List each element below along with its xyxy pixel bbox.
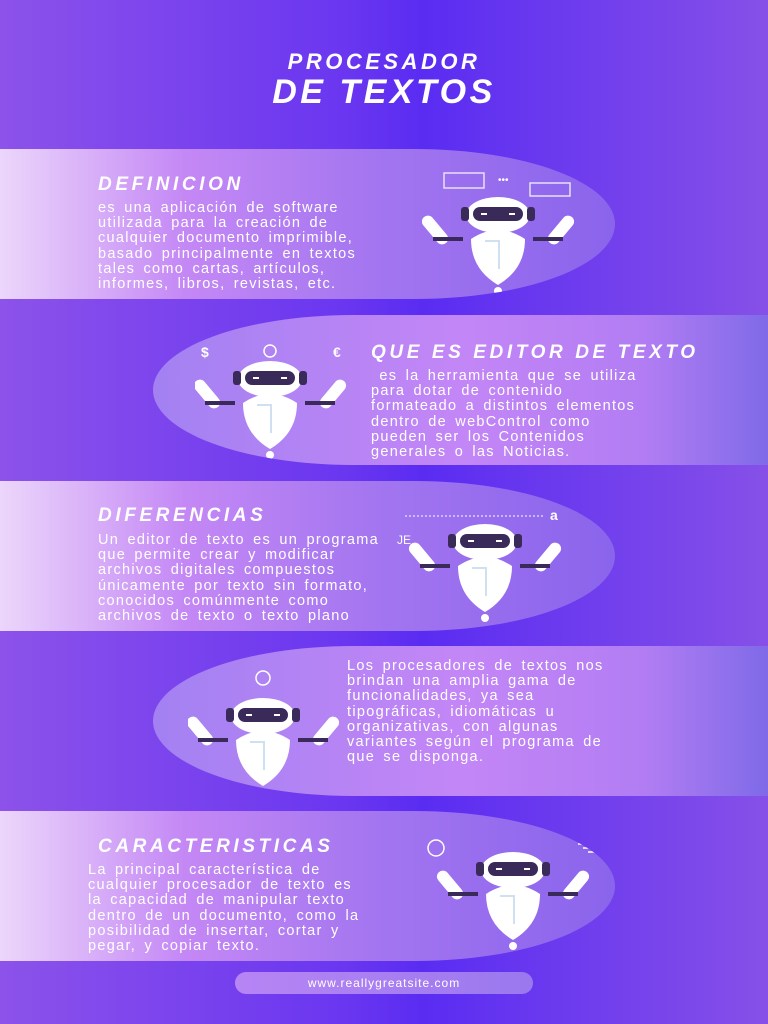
icon: robot with letters — [397, 507, 562, 622]
footer url pill: www.reallygreatsite.com — [308, 976, 460, 990]
text block: dentro de un documento, como la — [88, 908, 359, 924]
text block: únicamente por texto sin formato, — [98, 578, 368, 594]
text block: pueden ser los Contenidos — [371, 429, 585, 445]
text block: Los procesadores de textos nos — [347, 658, 604, 674]
text block: La principal característica de — [88, 862, 321, 878]
text block: archivos de texto o texto plano — [98, 608, 350, 624]
text block: utilizada para la creación de — [98, 215, 328, 231]
text block: cualquier procesador de texto es — [88, 877, 352, 893]
text block: brindan una amplia gama de — [347, 673, 577, 689]
text block: tales como cartas, artículos, — [98, 261, 325, 277]
title — [272, 49, 496, 111]
icon: robot with currency: $ — [201, 344, 209, 360]
text block — [347, 658, 604, 765]
text block: formateado a distintos elementos — [371, 398, 635, 414]
heading: DEFINICION — [98, 174, 244, 195]
icon: robot with currency — [195, 344, 346, 458]
text block: funcionalidades, ya sea — [347, 688, 534, 704]
icon: robot with bulb — [188, 670, 340, 788]
text block: para dotar de contenido — [371, 383, 563, 399]
text block: tipográficas, idiomáticas u — [347, 704, 555, 720]
footer url pill — [235, 972, 533, 994]
text block: que se disponga. — [347, 749, 484, 765]
heading: CARACTERISTICAS — [98, 836, 334, 857]
text block — [98, 200, 356, 292]
icon: robot with letters: a — [550, 507, 558, 523]
panel: que es editor de texto — [153, 315, 768, 465]
text block: dentro de webControl como — [371, 414, 591, 430]
text block: organizativas, con algunas — [347, 719, 558, 735]
heading: DIFERENCIAS — [98, 505, 266, 526]
text block: que permite crear y modificar — [98, 547, 335, 563]
text block: generales o las Noticias. — [371, 444, 570, 460]
text block: cualquier documento imprimible, — [98, 230, 353, 246]
text block: informes, libros, revistas, etc. — [98, 276, 336, 292]
icon: robot with windows: ••• — [498, 175, 509, 186]
text block: pegar, y copiar texto. — [88, 938, 260, 954]
heading: QUE ES EDITOR DE TEXTO — [371, 342, 699, 363]
text block: es una aplicación de software — [98, 200, 339, 216]
panel: funcionalidades — [153, 646, 768, 796]
text block — [88, 862, 359, 954]
icon: robot with letters: JE — [397, 533, 411, 547]
panel: caracteristicas — [0, 811, 615, 961]
panel: diferencias — [0, 481, 615, 631]
panel: definicion — [0, 149, 615, 299]
text block: basado principalmente en textos — [98, 246, 356, 262]
text block: Un editor de texto es un programa — [98, 532, 379, 548]
title: DE TEXTOS — [272, 73, 496, 111]
text block: posibilidad de insertar, cortar y — [88, 923, 340, 939]
text block: la capacidad de manipular texto — [88, 892, 345, 908]
icon: robot with currency: € — [333, 344, 341, 360]
text block: archivos digitales compuestos — [98, 562, 335, 578]
text block — [98, 532, 379, 624]
text block — [371, 368, 637, 460]
title: PROCESADOR — [288, 49, 480, 74]
text block: variantes según el programa de — [347, 734, 602, 750]
text block: conocidos comúnmente como — [98, 593, 329, 609]
text block: es la herramienta que se utiliza — [379, 368, 637, 384]
icon: robot with windows — [422, 172, 574, 293]
icon: robot with gear — [427, 839, 594, 950]
